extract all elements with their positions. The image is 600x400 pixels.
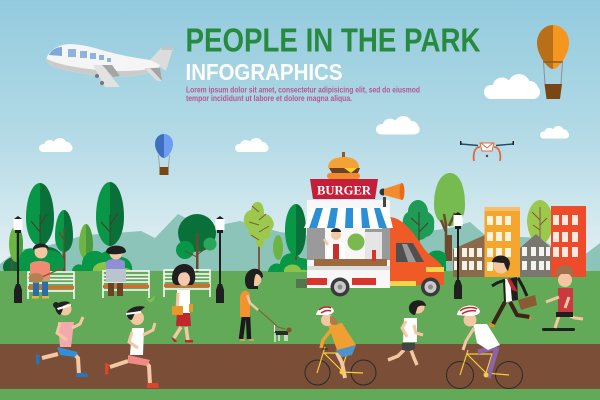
tree (26, 183, 54, 246)
tree behind buildings (527, 200, 553, 245)
cloud (39, 138, 73, 152)
subtitle: INFOGRAPHICS (186, 59, 342, 85)
grass (0, 271, 600, 400)
hot air balloon: blue (155, 134, 173, 175)
trees right (403, 173, 553, 271)
street lamp (454, 212, 462, 299)
bench (28, 272, 74, 299)
cloud (235, 138, 269, 152)
person: laptop user (106, 246, 126, 296)
plane (47, 44, 173, 87)
tree (55, 210, 73, 272)
cloud (376, 116, 420, 134)
burger sign: BURGER (317, 182, 372, 198)
small bush (145, 296, 155, 303)
dog and leash (259, 310, 292, 342)
house brown (453, 235, 485, 277)
drone (460, 141, 514, 161)
tree (79, 224, 93, 260)
bench (164, 270, 210, 297)
counter (314, 259, 387, 266)
awning (304, 208, 393, 228)
person: runner with watch (388, 300, 426, 365)
street lamp (14, 216, 22, 303)
running path (0, 344, 600, 389)
wheels (330, 278, 350, 296)
street lamp (216, 216, 224, 303)
person: woman with skirt (171, 264, 195, 342)
mountains (0, 214, 600, 275)
bush (72, 250, 132, 271)
bush (268, 253, 314, 272)
person: businessman running (489, 255, 537, 327)
house gray (520, 234, 551, 277)
title: PEOPLE IN THE PARK (186, 22, 481, 58)
tree (285, 204, 306, 260)
trees left (3, 182, 274, 272)
description text (186, 86, 420, 103)
stall interior (307, 228, 325, 260)
sauce bottle (372, 250, 376, 261)
person: runner pink (36, 301, 88, 377)
burger sign (310, 179, 378, 199)
person: skateboarder (542, 265, 583, 331)
cab (390, 217, 444, 285)
bench (103, 271, 149, 298)
building red (551, 206, 586, 277)
person: dog walker (240, 269, 292, 342)
hot air balloon: orange (537, 25, 569, 99)
bicycle (305, 347, 376, 385)
person: cyclist white (446, 306, 522, 388)
food truck (296, 200, 444, 296)
tree (273, 235, 283, 260)
tree round (176, 214, 216, 272)
cloud (540, 126, 569, 138)
buildings (453, 206, 586, 277)
burger icon (327, 152, 360, 179)
cloud (484, 74, 540, 99)
person: guitar player (28, 243, 62, 298)
red stripes (307, 278, 327, 285)
trees centre (268, 204, 314, 272)
sky background (0, 0, 600, 272)
bush (3, 247, 64, 271)
tree behind truck (434, 173, 465, 261)
bush (18, 248, 64, 271)
person: runner white (105, 306, 159, 388)
vendor (324, 228, 345, 259)
bicycle (446, 350, 522, 388)
building yellow (484, 207, 520, 277)
tree light (244, 202, 274, 272)
description text: Lorem ipsum dolor sit amet, consectetur adipisicing elit, sed do eiusmod (186, 86, 420, 94)
person: cyclist orange (305, 306, 376, 385)
megaphone (380, 183, 404, 207)
description text: tempor incididunt ut labore et dolore magna aliqua. (186, 94, 352, 103)
tree (96, 182, 124, 246)
tree (9, 226, 23, 271)
tree behind truck (403, 200, 446, 271)
truck body (307, 200, 390, 288)
